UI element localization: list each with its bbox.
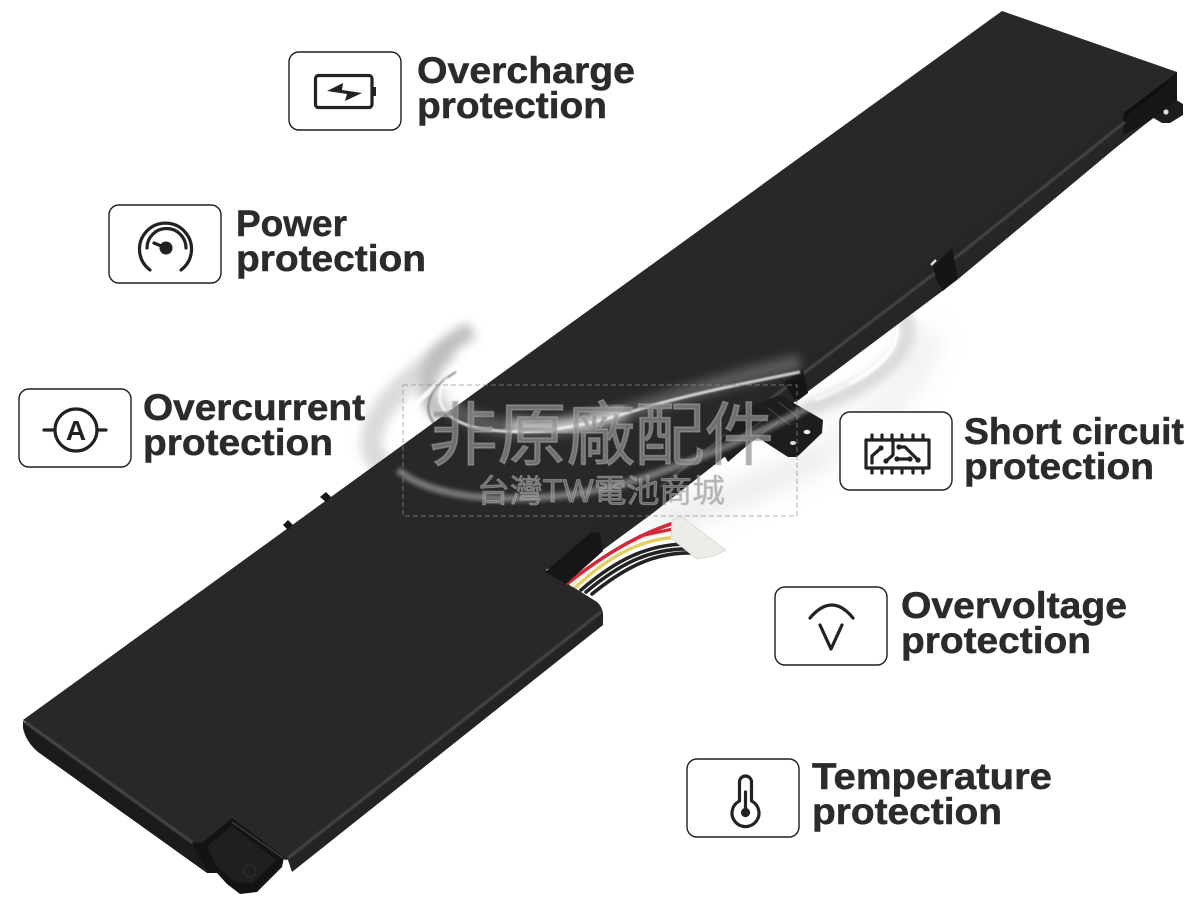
- icon box: ammeter: A: [66, 415, 86, 446]
- feature: overvoltage protection: [775, 585, 1127, 665]
- icon box: circuit chip: [840, 412, 952, 490]
- battery left end side: [23, 721, 207, 873]
- dashed watermark frame: [403, 385, 797, 516]
- feature: short circuit protection: [840, 411, 1184, 490]
- wire sleeve: [545, 532, 603, 584]
- watermark title: 非原廠配件: [428, 397, 774, 474]
- label: Temperature: [812, 756, 1052, 797]
- swirl highlights: [398, 362, 850, 499]
- label: Overcharge: [417, 50, 635, 91]
- mid mounting bracket: [718, 395, 823, 462]
- feature: overcurrent protection: [19, 387, 365, 467]
- battery lower front band: [287, 612, 603, 872]
- icon box: gauge: [109, 205, 221, 283]
- watermark overlay: [398, 362, 850, 516]
- battery long side band: [545, 60, 1177, 570]
- feature: power protection: [109, 203, 426, 283]
- wire harness: [568, 522, 693, 594]
- rear tab hole: [1163, 109, 1169, 115]
- label: Overvoltage: [901, 585, 1127, 626]
- white wire connector: [671, 517, 726, 559]
- battery rear mounting tab: [1145, 93, 1183, 123]
- label: protection: [143, 422, 333, 463]
- feature: overcharge protection: [289, 50, 635, 130]
- label: protection: [417, 85, 607, 126]
- icon box: thermometer: [687, 759, 799, 837]
- near-end plastic tab: [192, 818, 284, 894]
- label: Power: [236, 203, 347, 244]
- label: Short circuit: [964, 411, 1184, 452]
- label: Overcurrent: [143, 387, 365, 428]
- surface edge highlights: [25, 122, 1125, 858]
- icon box: battery charge: [289, 52, 401, 130]
- edge clips: [283, 248, 958, 530]
- icon box: voltage: [775, 587, 887, 665]
- rear end dark side: [1123, 72, 1177, 135]
- watermark subtitle: 台灣TW電池商城: [477, 473, 725, 509]
- label: protection: [812, 791, 1002, 832]
- rear connector recess: [1125, 77, 1174, 116]
- label: protection: [901, 620, 1091, 661]
- feature: temperature protection: [687, 756, 1052, 837]
- clip highlight: [931, 260, 936, 265]
- icon box: ammeter: [19, 389, 131, 467]
- watermark swirl behind battery: [371, 302, 928, 522]
- label: protection: [964, 446, 1154, 487]
- label: protection: [236, 238, 426, 279]
